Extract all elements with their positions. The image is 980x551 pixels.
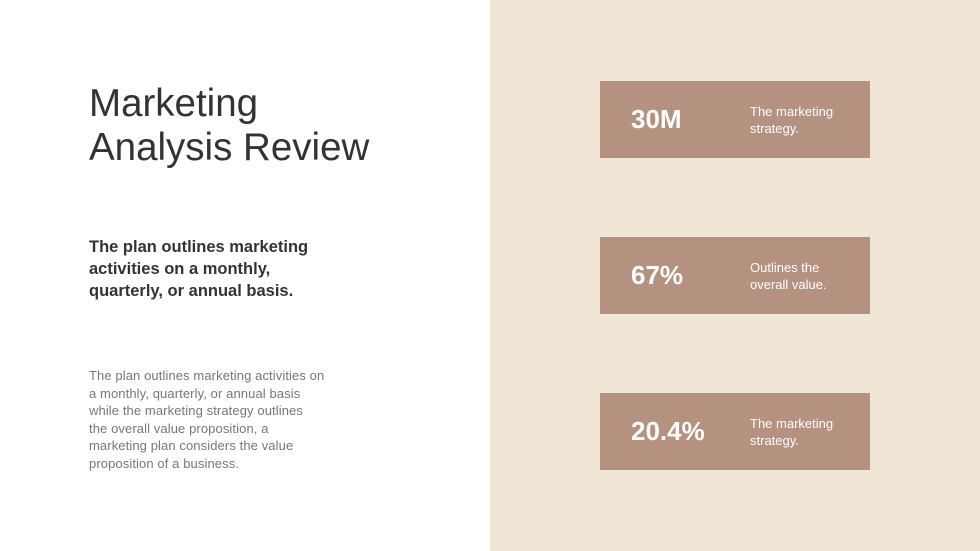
title	[89, 82, 370, 169]
subtitle: activities on a monthly,	[89, 260, 270, 278]
card: 67%: 67%	[631, 260, 683, 290]
body text	[89, 368, 324, 470]
title: Marketing	[89, 82, 258, 125]
card: 20.4%: 20.4%	[631, 416, 705, 446]
panel: right background	[490, 0, 980, 551]
body text: a monthly, quarterly, or annual basis	[89, 386, 300, 400]
body text: while the marketing strategy outlines	[89, 403, 303, 418]
body text: The plan outlines marketing activities on	[89, 368, 324, 383]
subtitle	[89, 238, 308, 300]
body text: proposition of a business.	[89, 456, 239, 470]
card: 30M: strategy.	[750, 121, 799, 136]
body text: marketing plan considers the value	[89, 438, 293, 453]
title: Analysis Review	[89, 126, 369, 169]
card: 30M: 30M	[631, 104, 682, 134]
card: 20.4%: strategy.	[750, 433, 799, 448]
card: 67%: Outlines the	[750, 260, 819, 275]
subtitle: quarterly, or annual basis.	[89, 282, 293, 300]
body text: the overall value proposition, a	[89, 420, 269, 436]
card: 20.4%: The marketing	[750, 416, 833, 431]
subtitle: The plan outlines marketing	[89, 238, 308, 256]
card: 30M: The marketing	[750, 104, 833, 119]
card: 20.4%	[600, 393, 870, 470]
card: 67%	[600, 237, 870, 314]
card: 30M	[600, 81, 870, 158]
card: 67%: overall value.	[750, 277, 827, 292]
